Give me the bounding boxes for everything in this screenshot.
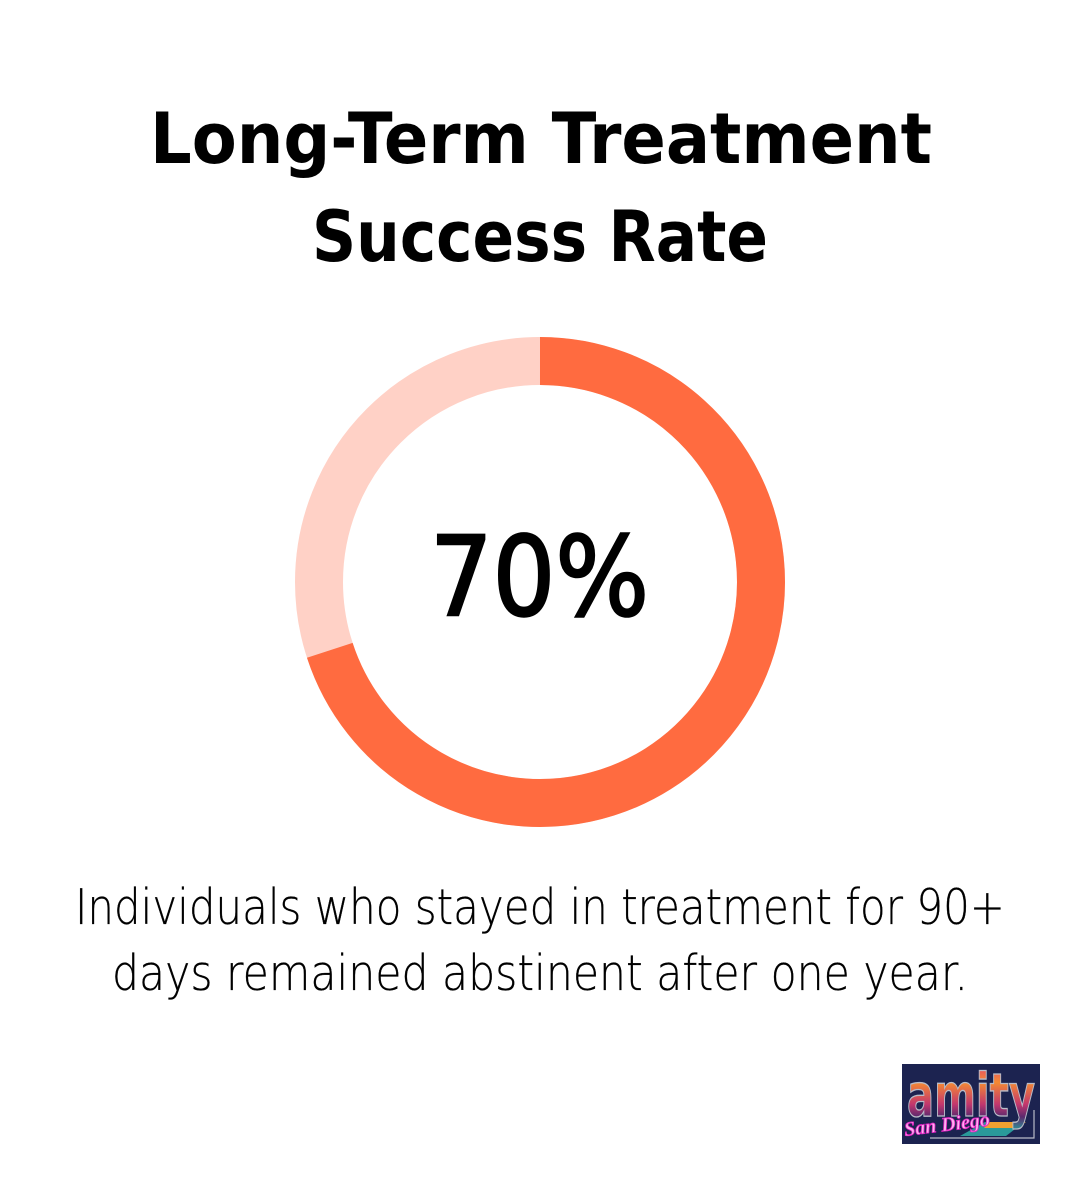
donut chart: 70%: [319, 361, 761, 803]
logo script: San Diego: San Diego: [903, 1109, 991, 1141]
logo: Amity San Diego: [902, 1061, 1040, 1144]
logo frame line: [930, 1110, 1034, 1138]
logo background: [902, 1064, 1040, 1144]
title: [150, 98, 932, 278]
description text: days remained abstinent after one year.: [112, 945, 968, 1002]
donut value arc: [330, 361, 761, 803]
center value: 70%: [430, 513, 649, 641]
title: Success Rate: [312, 196, 768, 278]
donut track: [319, 361, 761, 803]
logo beach stripe: [960, 1122, 1024, 1136]
description text: [75, 879, 1005, 1002]
logo word: amity: amity: [907, 1061, 1035, 1131]
title: Long-Term Treatment: [150, 98, 932, 180]
